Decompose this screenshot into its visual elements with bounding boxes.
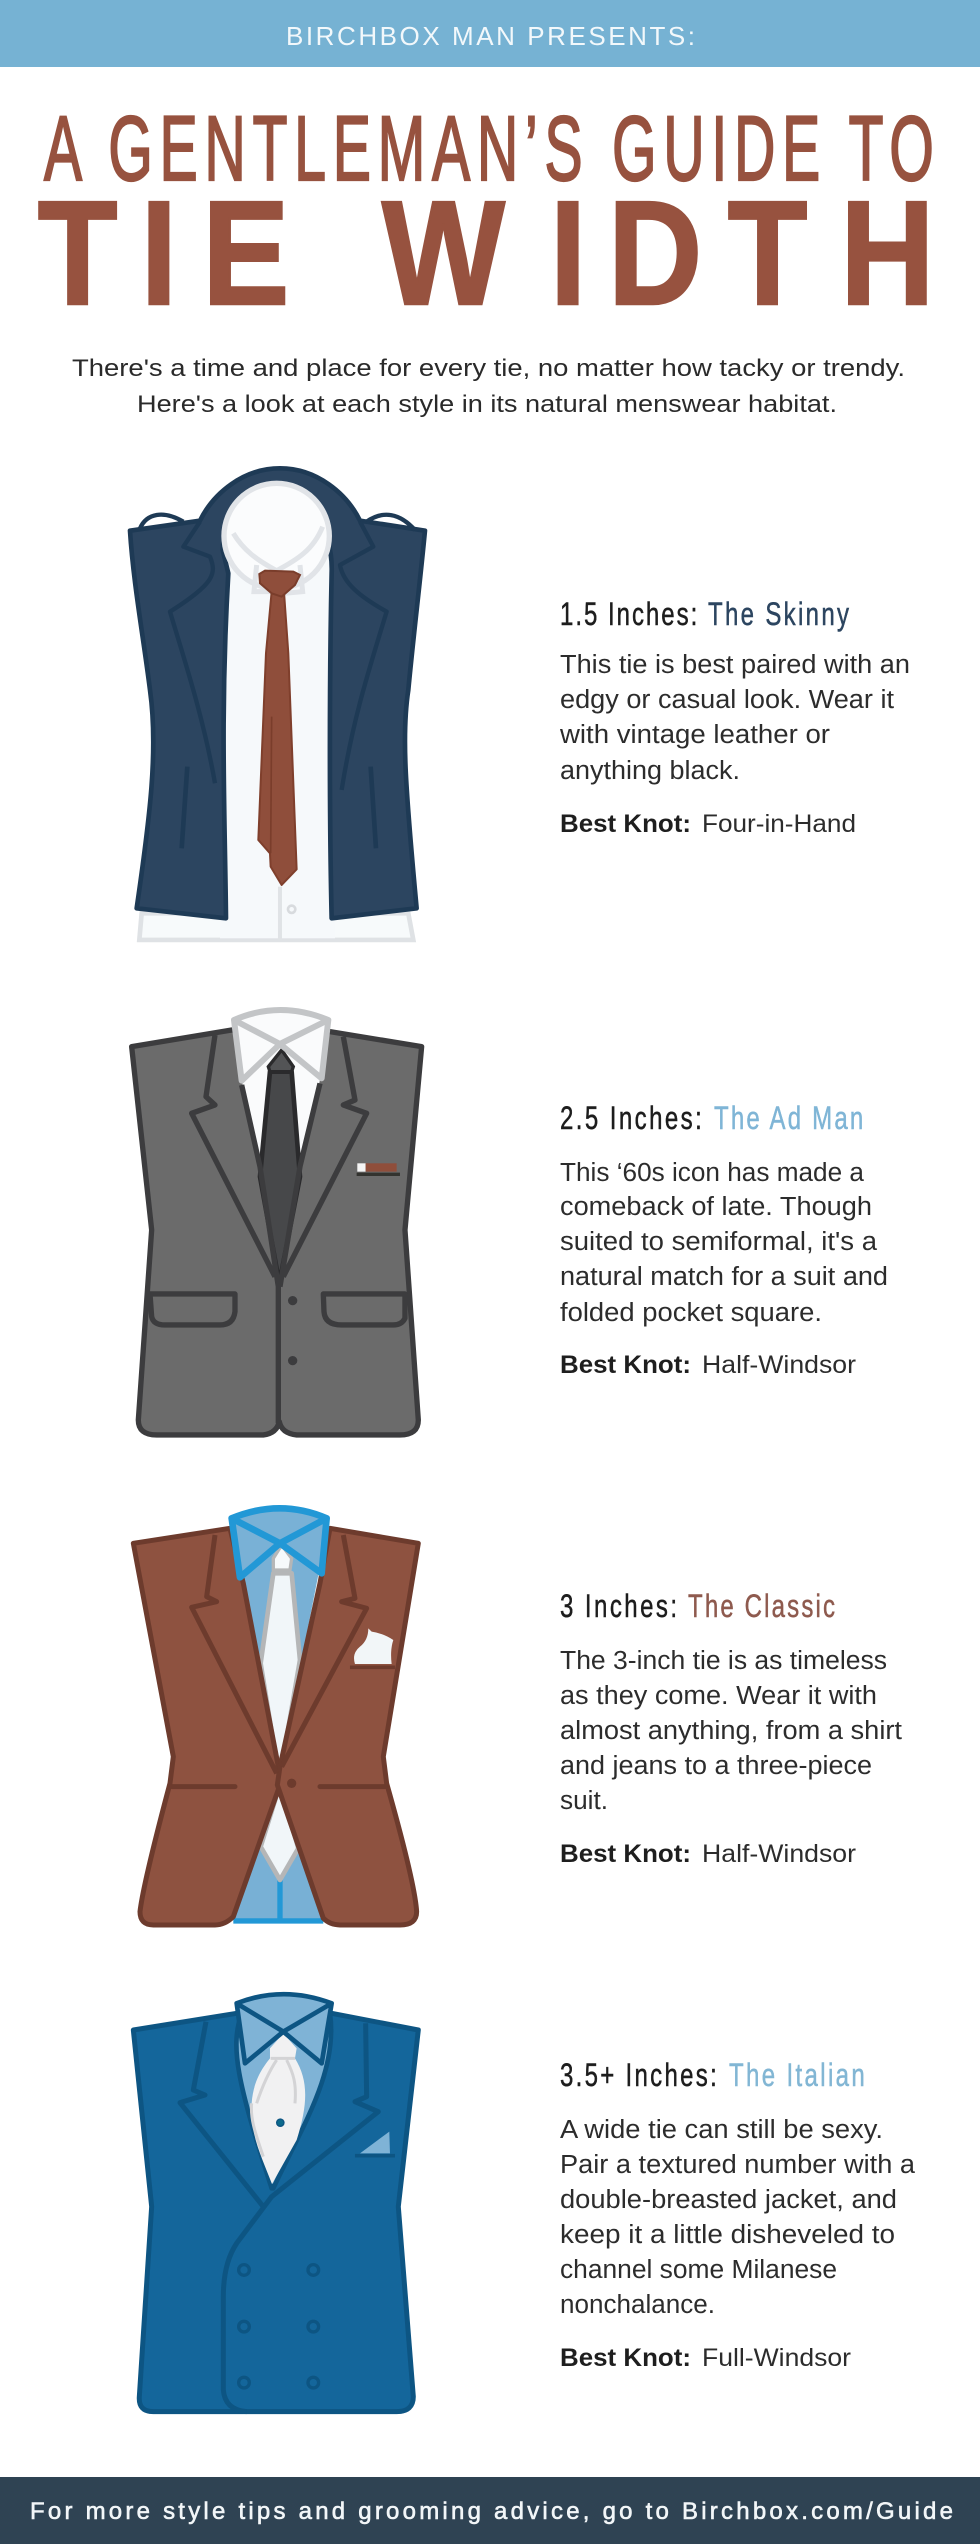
best knot: Best Knot:: [560, 1840, 691, 1868]
shirt front: [236, 2013, 331, 2188]
description: almost anything, from a shirt: [560, 1717, 902, 1745]
text block: The Italian: [560, 2057, 916, 2372]
text block: The Skinny: [559, 596, 910, 838]
title: [38, 98, 934, 336]
heading: 2.5 Inches:: [560, 1100, 702, 1136]
description: and jeans to a three-piece: [560, 1752, 872, 1780]
description: as they come. Wear it with: [560, 1682, 877, 1710]
description: anything black.: [560, 757, 740, 785]
illustration: blue double-breasted jacket with wide tie: [133, 1994, 418, 2412]
description: [560, 1159, 888, 1327]
title: A GENTLEMAN’S GUIDE TO: [44, 98, 934, 200]
heading: [560, 1588, 835, 1624]
jacket buttons: [239, 2265, 319, 2388]
description: [560, 2116, 916, 2319]
heading: [560, 2057, 865, 2093]
collar: [237, 1994, 332, 2063]
heading: The Italian: [729, 2057, 865, 2093]
description: suited to semiformal, it's a: [560, 1228, 878, 1256]
jacket body: [133, 2013, 418, 2412]
pocket square: [355, 2132, 395, 2156]
collar: [234, 1010, 328, 1081]
pocket square: [357, 1163, 400, 1174]
intro text: Here's a look at each style in its natural menswear habitat.: [137, 391, 837, 418]
jacket body: [130, 468, 425, 918]
jacket pockets: [150, 1294, 405, 1325]
footer: [0, 2477, 980, 2544]
best knot: Best Knot:: [560, 1351, 691, 1379]
text block: The Classic: [560, 1588, 902, 1868]
heading: 3 Inches:: [560, 1588, 677, 1624]
illustration: brown jacket with classic tie: [133, 1508, 418, 1925]
description: Pair a textured number with a: [560, 2151, 916, 2179]
description: A wide tie can still be sexy.: [560, 2116, 883, 2144]
description: This tie is best paired with an: [560, 651, 910, 679]
top banner: [0, 0, 980, 67]
intro text: There's a time and place for every tie, no matter how tacky or trendy.: [72, 355, 905, 382]
best knot: Four-in-Hand: [702, 810, 856, 838]
jacket body: [132, 1030, 422, 1435]
best knot: Best Knot:: [560, 2344, 691, 2372]
best knot: Full-Windsor: [702, 2344, 851, 2372]
heading: 3.5+ Inches:: [560, 2057, 717, 2093]
heading: The Ad Man: [714, 1100, 863, 1136]
pocket square: [350, 1628, 395, 1667]
heading: The Classic: [688, 1588, 835, 1624]
shoulder loops: [140, 515, 415, 530]
description: keep it a little disheveled to: [560, 2221, 895, 2249]
best knot: [560, 1351, 856, 1379]
footer: For more style tips and grooming advice, go to Birchbox.com/Guide: [30, 2498, 953, 2525]
illustration: gray jacket with ad man tie: [132, 1010, 422, 1435]
illustration: navy jacket with skinny tie: [130, 468, 425, 940]
buttons: [288, 1296, 297, 1365]
shirt: [232, 1523, 328, 1922]
collar: [224, 483, 329, 593]
description: The 3-inch tie is as timeless: [560, 1647, 887, 1675]
heading: [560, 596, 850, 632]
skinny tie: [258, 571, 300, 885]
description: folded pocket square.: [560, 1299, 822, 1327]
heading: 1.5 Inches:: [560, 596, 697, 632]
lapels: [192, 1535, 367, 1773]
description: channel some Milanese: [560, 2256, 837, 2284]
description: [560, 1647, 902, 1815]
best knot: [560, 2344, 851, 2372]
text block: The Ad Man: [560, 1100, 888, 1379]
heading: [560, 1100, 863, 1136]
description: [559, 651, 910, 785]
best knot: [560, 810, 856, 838]
description: double-breasted jacket, and: [560, 2186, 897, 2214]
shirt: [139, 550, 413, 940]
best knot: Half-Windsor: [702, 1351, 856, 1379]
heading: The Skinny: [708, 596, 850, 632]
description: edgy or casual look. Wear it: [560, 686, 894, 714]
tie: [261, 1545, 300, 1880]
description: comeback of late. Though: [560, 1193, 872, 1221]
title: TIE WIDTH: [38, 170, 934, 336]
description: suit.: [560, 1787, 608, 1815]
best knot: Best Knot:: [560, 810, 691, 838]
intro text: [72, 355, 905, 418]
top banner: BIRCHBOX MAN PRESENTS:: [286, 21, 695, 51]
lapels: [170, 522, 387, 790]
best knot: [560, 1840, 856, 1868]
description: with vintage leather or: [559, 721, 831, 749]
description: This ‘60s icon has made a: [560, 1159, 865, 1187]
wide tie: [251, 2033, 305, 2184]
button: [287, 1779, 296, 1788]
shirt front: [233, 1023, 328, 1167]
tie: [260, 1050, 300, 1283]
lapels: [192, 1035, 367, 1423]
description: nonchalance.: [560, 2291, 715, 2319]
description: natural match for a suit and: [560, 1263, 888, 1291]
jacket left panel: [133, 1528, 280, 1925]
best knot: Half-Windsor: [702, 1840, 856, 1868]
jacket right panel: [277, 1528, 418, 1925]
collar: [232, 1508, 327, 1577]
jacket pockets: [182, 767, 376, 848]
lapels and front edge: [180, 2022, 378, 2412]
jacket pockets: [172, 1779, 385, 1794]
